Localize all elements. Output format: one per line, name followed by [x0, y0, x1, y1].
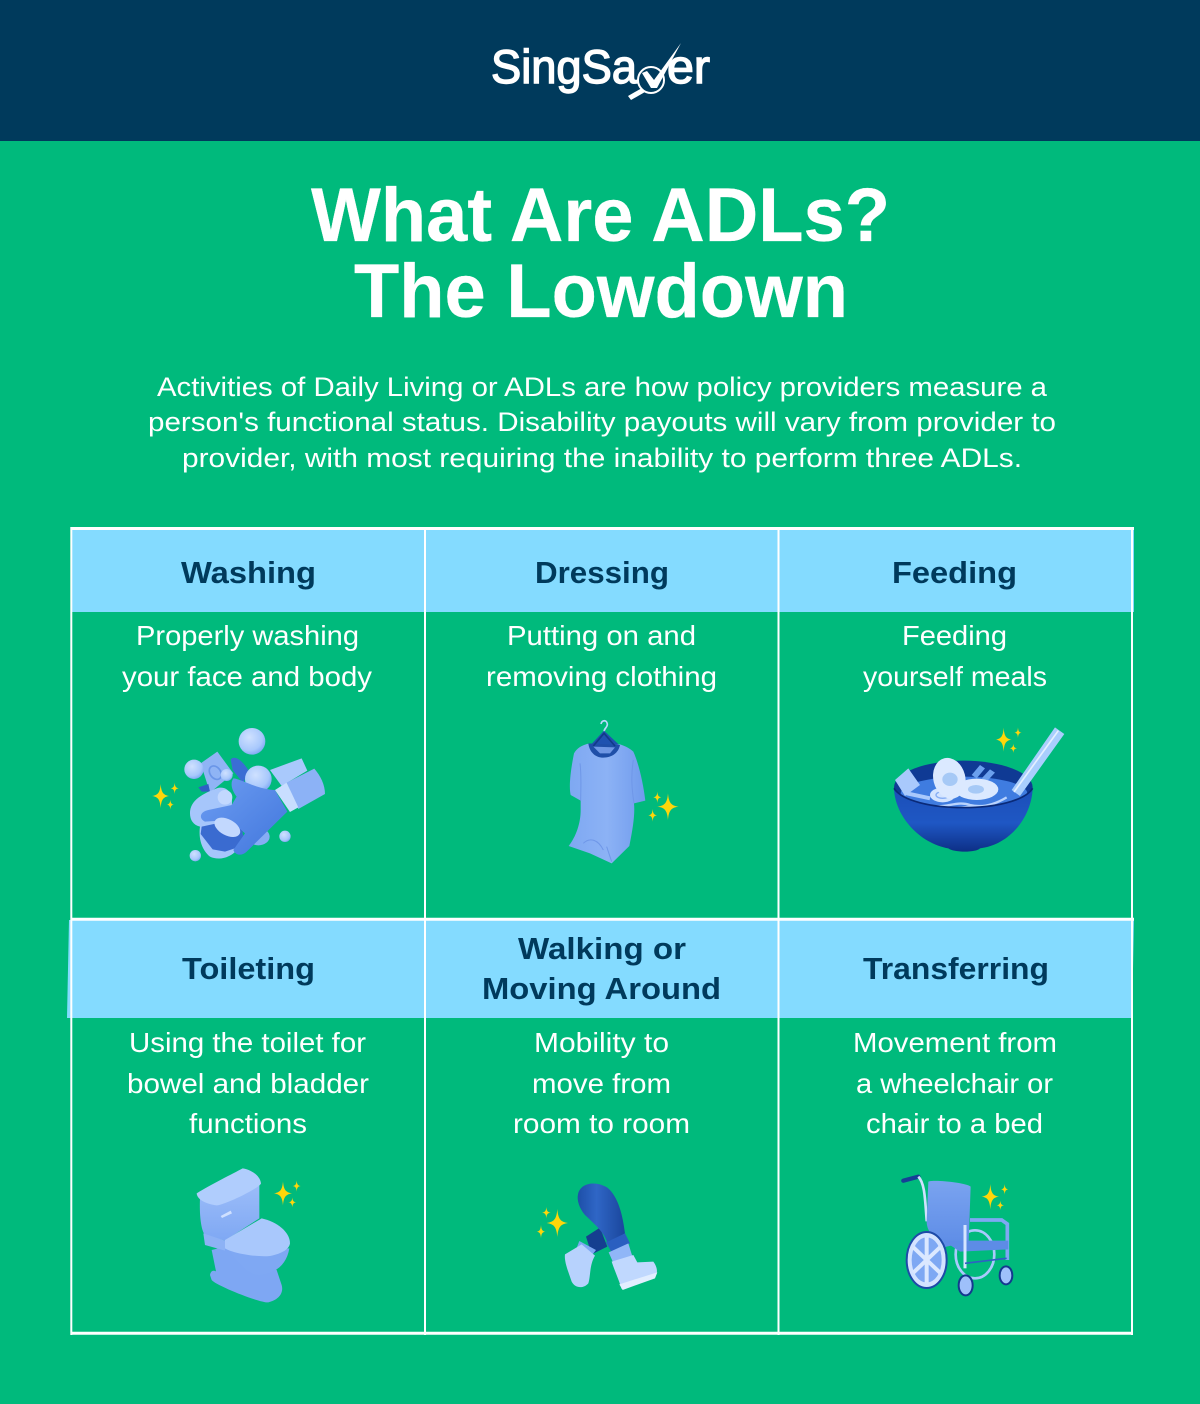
header: Walking or Moving Around: [425, 920, 778, 1018]
header: Washing: Washing: [181, 555, 316, 590]
logo: SingSaver: [491, 40, 710, 100]
header: Walking or Moving Around: Moving Around: [482, 971, 721, 1006]
panel: Toileting: [67, 920, 425, 1302]
text: Walking description: [513, 1027, 690, 1139]
text: Dressing description: [486, 620, 717, 692]
text: Walking description: move from: [532, 1068, 671, 1099]
icon: wheelchair: [903, 1177, 1012, 1295]
text: Transferring description: Movement from: [853, 1027, 1057, 1058]
header: Transferring: Transferring: [863, 951, 1049, 986]
icon: washing hands: [152, 728, 325, 861]
panel: Feeding: [778, 530, 1134, 852]
text: Feeding description: [863, 620, 1047, 692]
text: Toileting description: Using the toilet for: [129, 1027, 366, 1058]
logo: SingSaver: er: [667, 40, 710, 93]
intro paragraph: provider, with most requiring the inability to perform three ADLs.: [182, 443, 1022, 473]
header: Walking or Moving Around: Walking or: [518, 931, 686, 966]
text: Transferring description: [853, 1027, 1057, 1139]
header: Washing: [71, 530, 425, 612]
text: Washing description: Properly washing: [136, 620, 359, 651]
text: Dressing description: removing clothing: [486, 661, 717, 692]
header: Dressing: Dressing: [535, 555, 669, 590]
header: Dressing: [425, 530, 778, 612]
title: What Are ADLs?: [311, 173, 890, 258]
text: Washing description: [122, 620, 372, 692]
panel: Transferring: [778, 920, 1134, 1295]
panel: Dressing: [425, 530, 778, 863]
header band with logo: [0, 0, 1200, 141]
text: Walking description: room to room: [513, 1108, 690, 1139]
icon: t-shirt on hanger: [569, 721, 679, 863]
intro paragraph: person's functional status. Disability payouts will vary from provider to: [148, 407, 1056, 437]
text: Toileting description: bowel and bladder: [127, 1068, 369, 1099]
header: Feeding: [778, 530, 1134, 612]
text: Dressing description: Putting on and: [507, 620, 696, 651]
text: Transferring description: chair to a bed: [866, 1108, 1043, 1139]
text: Toileting description: functions: [189, 1108, 307, 1139]
text: Toileting description: [127, 1027, 369, 1139]
text: Transferring description: a wheelchair or: [856, 1068, 1053, 1099]
logo: SingSaver: SingSa: [491, 40, 638, 93]
title: [311, 173, 890, 334]
text: Feeding description: yourself meals: [863, 661, 1047, 692]
text: Feeding description: Feeding: [902, 620, 1007, 651]
icon: toilet: [197, 1168, 301, 1302]
icon: noodle bowl: [894, 727, 1064, 852]
header: Toileting: Toileting: [182, 951, 315, 986]
icon: walking legs: [537, 1184, 657, 1290]
header: Toileting: [67, 920, 425, 1018]
text: Washing description: your face and body: [122, 661, 372, 692]
panel: Walking or Moving Around: [425, 920, 778, 1290]
header: Transferring: [778, 920, 1134, 1018]
panel: Washing: [71, 530, 425, 861]
text: Walking description: Mobility to: [534, 1027, 669, 1058]
header: Feeding: Feeding: [892, 555, 1017, 590]
intro paragraph: Activities of Daily Living or ADLs are how policy providers measure a: [157, 372, 1048, 402]
title: The Lowdown: [354, 249, 848, 334]
intro paragraph: [148, 372, 1056, 473]
